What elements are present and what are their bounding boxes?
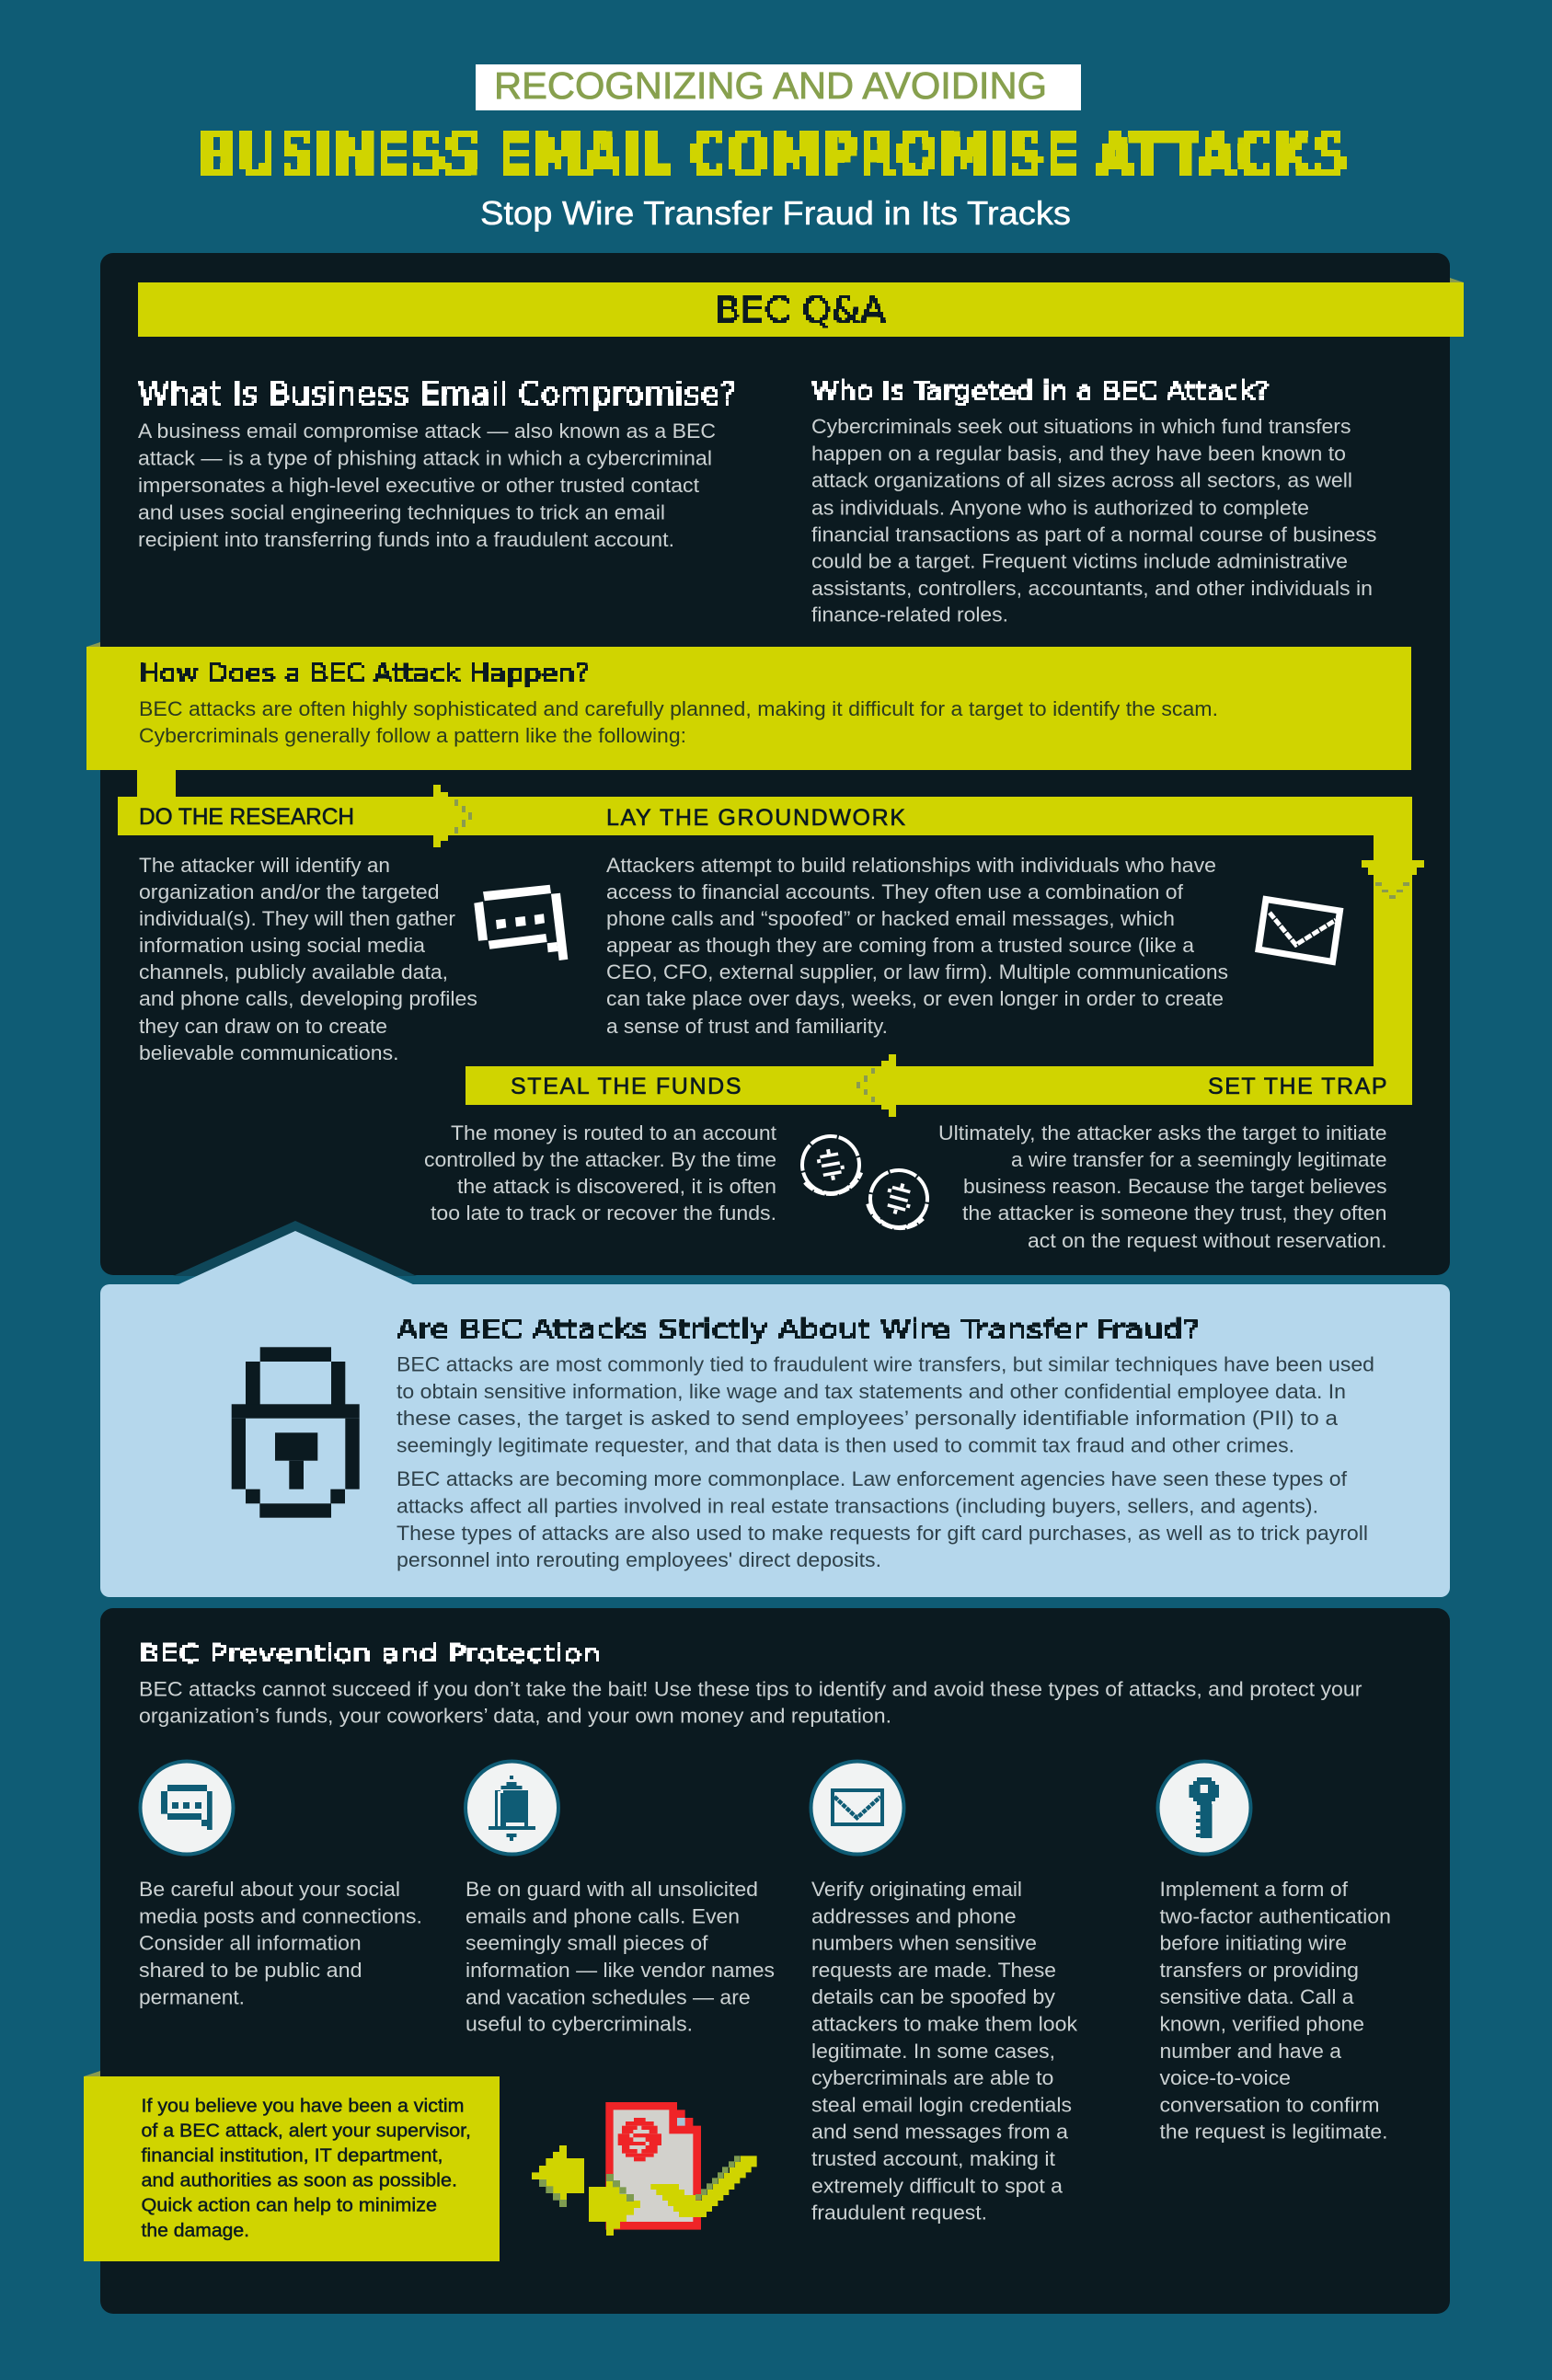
subtitle: Stop Wire Transfer Fraud in Its Tracks	[480, 194, 1071, 232]
who is targeted block: Cybercriminals seek out situations in which fund transfers	[811, 415, 1351, 438]
tip 4 text: the request is legitimate.	[1159, 2121, 1387, 2144]
step: lay the groundwork: appear as though they are coming from a trusted source (like a	[606, 934, 1195, 957]
step: steal the funds: controlled by the attacker. By the time	[424, 1148, 776, 1171]
tip 3 text: and send messages from a	[811, 2121, 1069, 2144]
tip 4 text: conversation to confirm	[1159, 2093, 1380, 2116]
step: steal the funds	[424, 1074, 776, 1224]
step: do the research: DO THE RESEARCH	[139, 804, 354, 830]
tip 3 text: cybercriminals are able to	[811, 2066, 1053, 2089]
tip 3 text: addresses and phone	[811, 1904, 1017, 1927]
who is targeted block: financial transactions as part of a normal course of business	[811, 523, 1376, 546]
tip 4 text	[1159, 1878, 1391, 2144]
tip 4 text: number and have a	[1159, 2040, 1342, 2063]
tip 3 text: requests are made. These	[811, 1959, 1056, 1982]
step: do the research: and phone calls, developing profiles	[139, 987, 477, 1010]
tip 3 text: fraudulent request.	[811, 2202, 987, 2225]
step: set the trap: SET THE TRAP	[1208, 1074, 1387, 1099]
who is targeted block	[811, 375, 1376, 626]
body text: these cases, the target is asked to send employees’ personally identifiable information (PII) to a	[397, 1407, 1339, 1430]
panel: prevention and protection	[84, 1608, 1450, 2314]
step: lay the groundwork: LAY THE GROUNDWORK	[606, 805, 905, 831]
panel: BEC Q&A	[86, 253, 1464, 1275]
step: do the research: individual(s). They will then gather	[139, 907, 455, 930]
tip 4 text: sensitive data. Call a	[1159, 1985, 1354, 2008]
kicker band: RECOGNIZING AND AVOIDING	[494, 64, 1047, 107]
intro text: organization’s funds, your coworkers’ data, and your own money and reputation.	[139, 1705, 891, 1728]
icon: padlock	[232, 1347, 360, 1518]
icon: envelope badge	[811, 1761, 903, 1855]
what is BEC block: A business email compromise attack — also known as a BEC	[138, 420, 716, 443]
icon: bell badge	[466, 1761, 558, 1855]
tip 4 text: before initiating wire	[1159, 1932, 1347, 1955]
band fold	[1450, 278, 1464, 282]
callout: Quick action can help to minimize	[142, 2195, 437, 2216]
what is BEC block	[138, 376, 737, 551]
who is targeted block: assistants, controllers, accountants, and other individuals in	[811, 577, 1373, 600]
how does it happen band: How Does a BEC Attack Happen?	[139, 658, 590, 688]
step: do the research: information using social media	[139, 934, 426, 957]
intro text: BEC attacks cannot succeed if you don’t take the bait! Use these tips to identify and avoid these types of attacks, and protect your	[139, 1678, 1362, 1701]
step: lay the groundwork: a sense of trust and familiarity.	[606, 1015, 888, 1038]
who is targeted block: happen on a regular basis, and they have been known to	[811, 442, 1346, 466]
step: lay the groundwork: can take place over days, weeks, or even longer in order to create	[606, 987, 1224, 1010]
step: steal the funds: the attack is discovered, it is often	[457, 1175, 776, 1198]
step: steal the funds: too late to track or recover the funds.	[431, 1201, 776, 1224]
step: steal the funds: STEAL THE FUNDS	[511, 1074, 742, 1099]
step: set the trap: business reason. Because the target believes	[963, 1175, 1387, 1198]
tip 2 text: seemingly small pieces of	[466, 1932, 708, 1954]
arrow: left	[856, 1054, 896, 1117]
tip 2 text: emails and phone calls. Even	[466, 1904, 740, 1928]
BEC Q&A banner: BEC Q&A	[715, 290, 886, 330]
step: do the research: believable communications.	[139, 1041, 399, 1064]
intro text	[139, 1678, 1362, 1728]
step: do the research: The attacker will identify an	[139, 854, 390, 877]
what is BEC block: impersonates a high-level executive or other trusted contact	[138, 474, 699, 497]
process path connector	[118, 770, 1412, 1105]
callout: If you believe you have been a victim	[142, 2096, 464, 2117]
arrow: right	[433, 785, 472, 847]
step: do the research	[139, 804, 477, 1064]
what is BEC block: What Is Business Email Compromise?	[138, 376, 737, 413]
tip 3 text: numbers when sensitive	[811, 1932, 1037, 1955]
how does it happen band: BEC attacks are often highly sophisticated and carefully planned, making it difficult for a target to identify the scam.	[139, 697, 1218, 720]
callout: of a BEC attack, alert your supervisor,	[142, 2121, 471, 2142]
body text: BEC attacks are becoming more commonplace. Law enforcement agencies have seen these types of	[397, 1467, 1348, 1490]
tip 3 text: details can be spoofed by	[811, 1985, 1055, 2008]
callout: financial institution, IT department,	[142, 2145, 443, 2167]
step: do the research: organization and/or the targeted	[139, 880, 440, 903]
how does it happen band: Cybercriminals generally follow a pattern like the following:	[139, 724, 686, 747]
tip 2 text	[466, 1878, 775, 2035]
step: set the trap: a wire transfer for a seemingly legitimate	[1011, 1148, 1387, 1171]
icon: speech bubble	[474, 885, 568, 960]
what is BEC block: attack — is a type of phishing attack in which a cybercriminal	[138, 447, 712, 469]
icon: key badge	[1157, 1761, 1251, 1855]
tip 3 text	[811, 1878, 1078, 2225]
who is targeted block: finance-related roles.	[811, 604, 1008, 626]
icon: fraudulent invoice with arrows and check	[532, 2102, 757, 2236]
step: lay the groundwork: Attackers attempt to build relationships with individuals who have	[606, 854, 1216, 877]
step: steal the funds: The money is routed to an account	[451, 1121, 776, 1144]
step: set the trap	[938, 1074, 1387, 1252]
tip 1 text: Consider all information	[139, 1932, 362, 1954]
header	[199, 64, 1349, 232]
tip 1 text: media posts and connections.	[139, 1904, 422, 1928]
tip 2 text: useful to cybercriminals.	[466, 2013, 693, 2035]
tip 4 text: known, verified phone	[1159, 2013, 1364, 2035]
callout: and authorities as soon as possible.	[142, 2170, 457, 2191]
what is BEC block: and uses social engineering techniques to trick an email	[138, 500, 665, 524]
tip 3 text: Verify originating email	[811, 1878, 1022, 1901]
step: do the research: channels, publicly available data,	[139, 960, 448, 983]
tip 2 text: and vacation schedules — are	[466, 1985, 751, 2009]
step: set the trap: act on the request without reservation.	[1028, 1229, 1387, 1252]
body text: to obtain sensitive information, like wage and tax statements and other confidential employee data. In	[397, 1380, 1346, 1403]
tip 3 text: steal email login credentials	[811, 2093, 1072, 2116]
body text	[397, 1353, 1374, 1571]
panel: wire transfer fraud	[100, 1221, 1450, 1597]
heading: BEC Prevention and Protection	[139, 1639, 602, 1669]
tip 1 text: shared to be public and	[139, 1959, 362, 1982]
step: lay the groundwork: access to financial accounts. They often use a combination of	[606, 880, 1184, 903]
step: set the trap: the attacker is someone they trust, they often	[962, 1201, 1387, 1224]
tip 1 text	[139, 1878, 422, 2009]
tip 1 text: permanent.	[139, 1985, 245, 2009]
tip 3 text: attackers to make them look	[811, 2013, 1078, 2035]
tip 2 text: information — like vendor names	[466, 1959, 775, 1982]
tip 3 text: extremely difficult to spot a	[811, 2174, 1063, 2197]
arrow: down	[1362, 860, 1424, 899]
body text: BEC attacks are most commonly tied to fraudulent wire transfers, but similar techniques have been used	[397, 1353, 1374, 1376]
icon: chat badge	[140, 1761, 234, 1855]
who is targeted block: could be a target. Frequent victims include administrative	[811, 550, 1348, 572]
step: do the research: they can draw on to create	[139, 1015, 387, 1038]
icon: coin left	[798, 1132, 864, 1199]
who is targeted block: as individuals. Anyone who is authorized to complete	[811, 497, 1309, 519]
tip 4 text: transfers or providing	[1159, 1959, 1359, 1982]
step: set the trap: Ultimately, the attacker asks the target to initiate	[938, 1121, 1387, 1144]
icon: envelope	[1259, 900, 1339, 962]
tip 2 text: Be on guard with all unsolicited	[466, 1878, 758, 1901]
body text: personnel into rerouting employees' direct deposits.	[397, 1548, 881, 1571]
callout: the damage.	[142, 2220, 249, 2241]
tip 3 text: legitimate. In some cases,	[811, 2040, 1055, 2063]
BEC Q&A banner	[138, 282, 1464, 337]
step: lay the groundwork: CEO, CFO, external supplier, or law firm). Multiple communications	[606, 960, 1228, 983]
how does it happen band	[86, 642, 1411, 770]
step: lay the groundwork: phone calls and “spoofed” or hacked email messages, which	[606, 907, 1175, 930]
body text: These types of attacks are also used to make requests for gift card purchases, as well as to trick payroll	[397, 1522, 1368, 1545]
who is targeted block: Who Is Targeted in a BEC Attack?	[811, 375, 1270, 406]
tip 4 text: Implement a form of	[1159, 1878, 1349, 1901]
step: lay the groundwork	[606, 805, 1228, 1038]
what is BEC block: recipient into transferring funds into a fraudulent account.	[138, 528, 674, 551]
who is targeted block: attack organizations of all sizes across all sectors, as well	[811, 469, 1352, 491]
body text: seemingly legitimate requester, and that data is then used to commit tax fraud and other crimes.	[397, 1434, 1294, 1457]
tip 4 text: voice-to-voice	[1159, 2066, 1291, 2089]
tip 4 text: two-factor authentication	[1159, 1904, 1391, 1927]
tip 3 text: trusted account, making it	[811, 2147, 1055, 2170]
heading: Are BEC Attacks Strictly About Wire Transfer Fraud?	[397, 1314, 1200, 1344]
body text: attacks affect all parties involved in real estate transactions (including buyers, sellers, and agents).	[397, 1495, 1318, 1518]
icon: coin right	[864, 1164, 934, 1235]
callout	[84, 2071, 500, 2261]
tip 1 text: Be careful about your social	[139, 1878, 400, 1901]
